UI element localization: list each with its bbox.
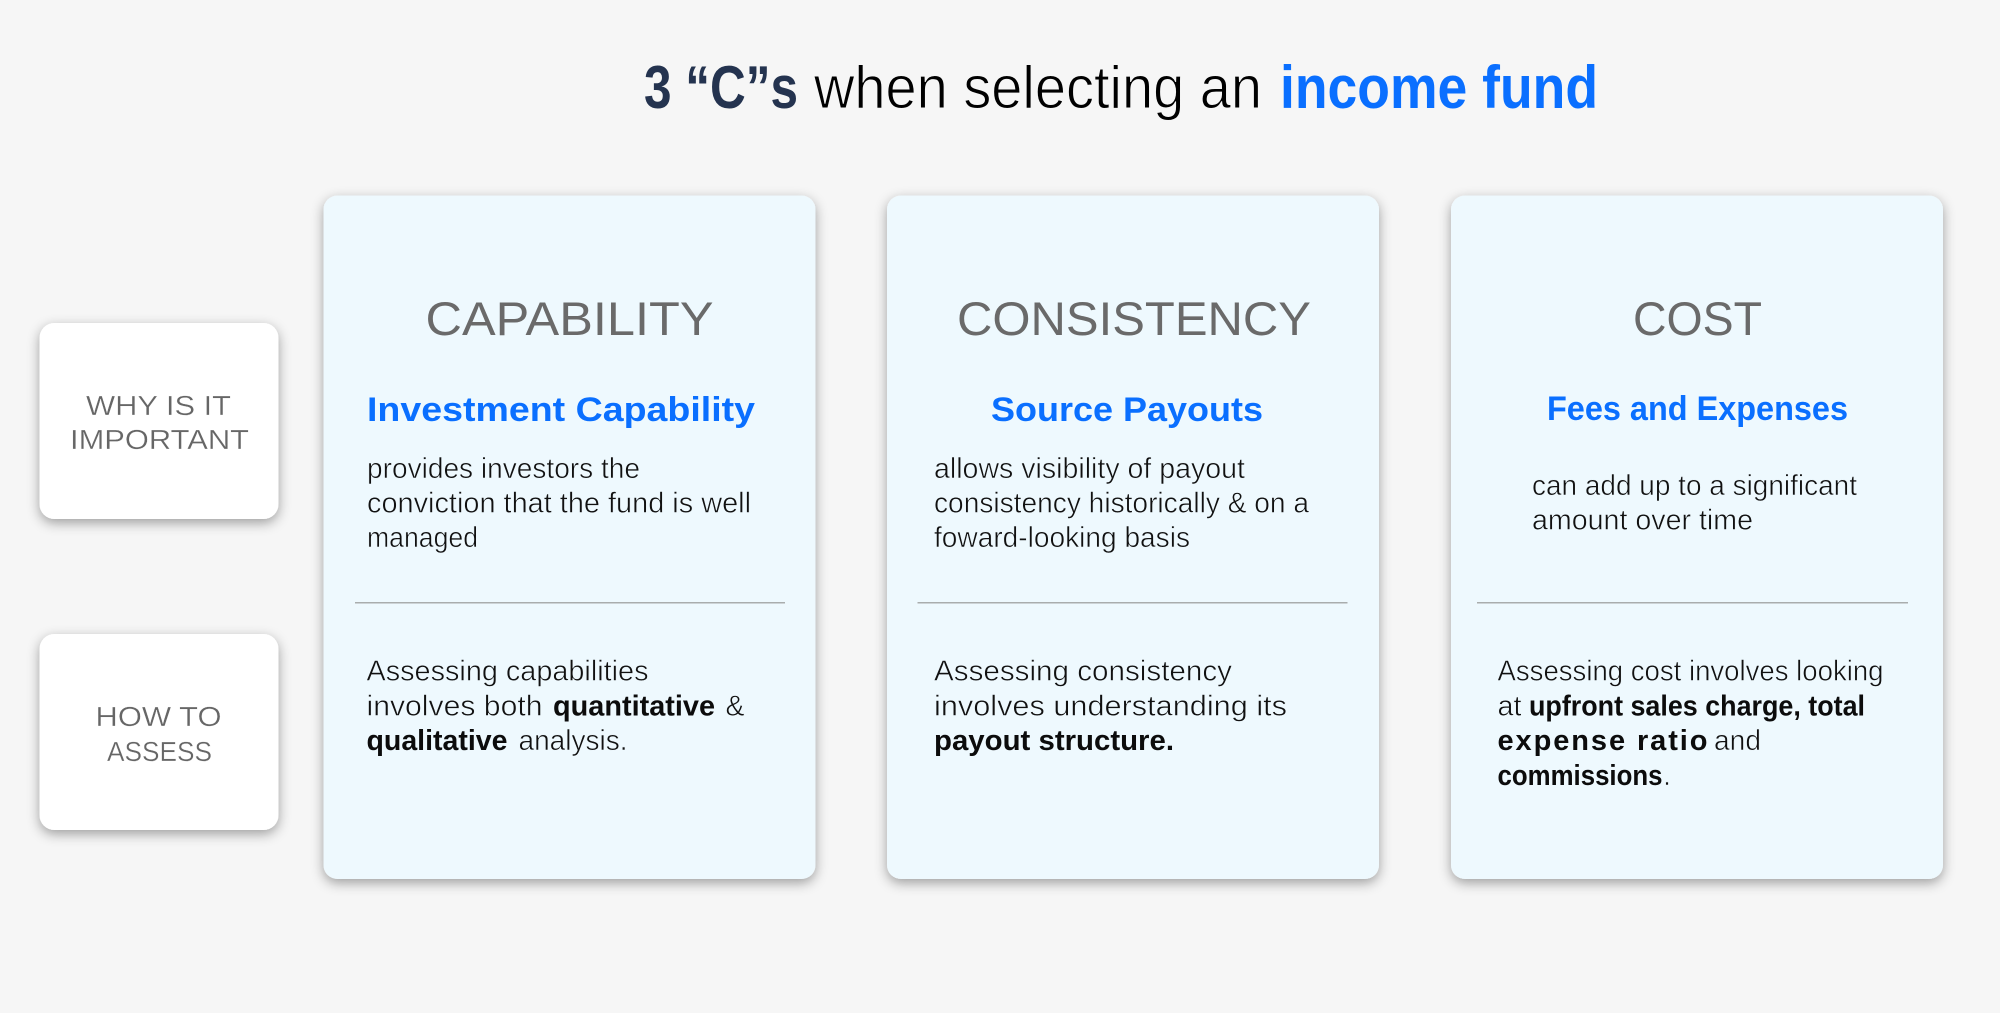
row label: why is it important (40, 323, 278, 519)
how text: capability: Assessing capabilities (366, 656, 648, 688)
how text: cost: Assessing cost involves looking (1498, 656, 1884, 688)
row label: why is it important: IMPORTANT (70, 424, 249, 455)
title: 3 “C”s (644, 54, 798, 121)
how text: capability: quantitative (553, 690, 715, 722)
title: income fund (1280, 54, 1598, 121)
how text: capability: involves both (366, 690, 542, 722)
heading: consistency: CONSISTENCY (957, 292, 1311, 345)
subheading: fees and expenses: Fees and Expenses (1547, 390, 1848, 428)
why text: cost (1532, 470, 1857, 536)
why text: consistency: foward-looking basis (934, 522, 1190, 554)
how text: cost: and (1714, 725, 1761, 757)
how text: consistency: involves understanding its (934, 690, 1287, 722)
how text: capability: qualitative (366, 725, 508, 757)
panel: cost (1451, 196, 1943, 879)
why text: cost: amount over time (1532, 504, 1753, 536)
panel: capability (324, 196, 816, 879)
why text: capability (367, 453, 751, 554)
how text: capability: & (726, 690, 744, 722)
how text: cost: commissions (1498, 760, 1662, 792)
how text: consistency: Assessing consistency (934, 656, 1233, 688)
heading: capability: CAPABILITY (426, 292, 714, 345)
how text: consistency: payout structure. (934, 725, 1174, 757)
subheading: investment capability: Investment Capability (367, 391, 755, 429)
why text: capability: conviction that the fund is well (367, 488, 751, 520)
panel: consistency (887, 196, 1379, 879)
why text: consistency: allows visibility of payout (934, 453, 1245, 485)
how text: cost (1498, 656, 1884, 792)
row label: how to assess (40, 634, 278, 830)
title (644, 54, 1598, 121)
why text: consistency: consistency historically & on a (934, 488, 1310, 520)
how text: cost: at (1498, 690, 1522, 722)
why text: capability: provides investors the (367, 453, 640, 485)
subheading: source payouts: Source Payouts (991, 391, 1263, 429)
why text: cost: can add up to a significant (1532, 470, 1857, 502)
how text: capability: analysis. (518, 725, 628, 757)
how text: cost: expense ratio (1498, 725, 1708, 757)
title: when selecting an (813, 54, 1262, 121)
how text: cost: . (1663, 760, 1671, 792)
how text: cost: upfront sales charge, total (1529, 690, 1865, 722)
row label: how to assess: HOW TO (96, 701, 222, 732)
why text: consistency (934, 453, 1310, 554)
row label: how to assess: ASSESS (107, 736, 212, 767)
row label: why is it important: WHY IS IT (86, 390, 231, 421)
how text: consistency (934, 656, 1287, 757)
why text: capability: managed (367, 522, 478, 554)
heading: cost: COST (1633, 292, 1762, 345)
how text: capability (366, 656, 744, 757)
